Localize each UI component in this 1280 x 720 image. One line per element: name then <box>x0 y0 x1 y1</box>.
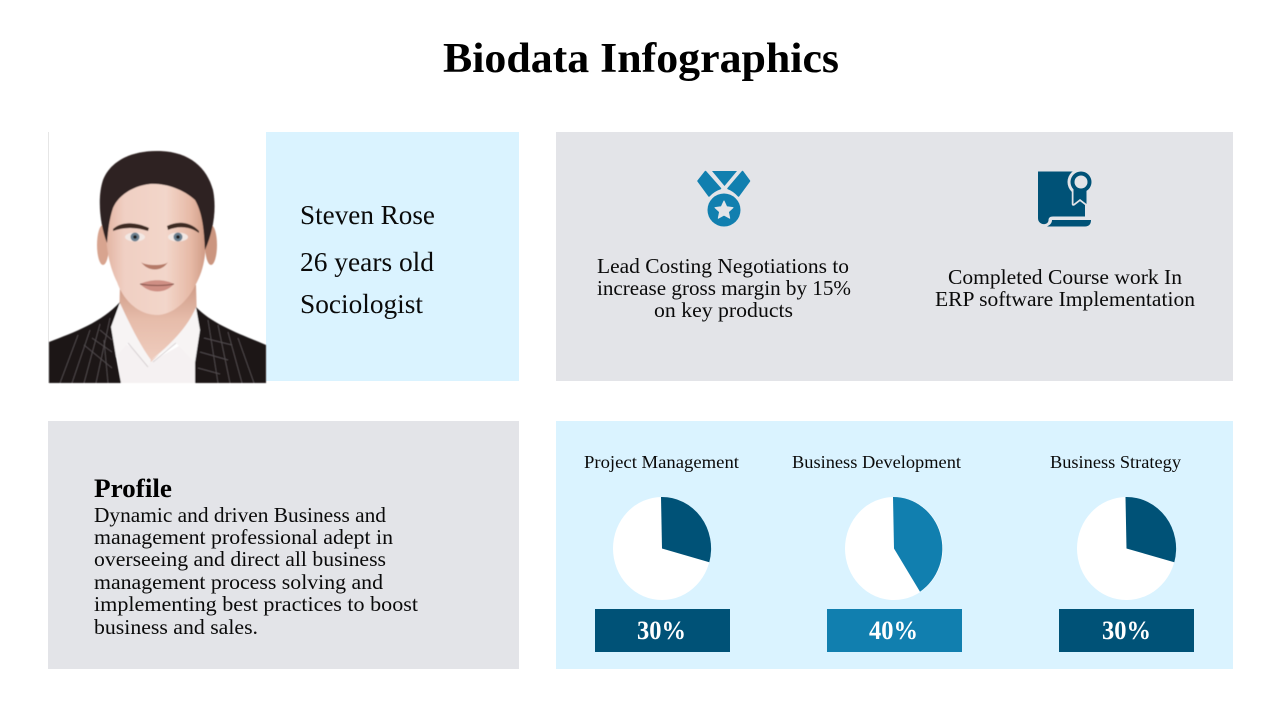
profile heading: Profile <box>94 473 172 503</box>
profile body text: Dynamic and driven Business and <box>94 503 386 527</box>
achievement text: course work: Completed Course work In <box>948 265 1182 289</box>
achievement text: costing: Lead Costing Negotiations to <box>597 254 849 278</box>
skill: project management: Project Management <box>584 452 739 472</box>
title: Biodata Infographics <box>443 36 839 82</box>
achievement text: costing: on key products <box>654 298 793 322</box>
profile body text: management process solving and <box>94 570 383 594</box>
icon: medal <box>698 171 750 226</box>
profile body text: business and sales. <box>94 615 258 639</box>
achievement text: costing <box>597 254 851 322</box>
skill: business development: 40% <box>869 616 918 645</box>
occupation: Sociologist <box>300 289 424 319</box>
profile body text: management professional adept in <box>94 525 393 549</box>
achievement text: course work <box>935 265 1195 311</box>
skill: business development <box>792 452 962 652</box>
panel: profile <box>48 421 519 669</box>
skill: business strategy <box>1050 452 1194 652</box>
panel: skills <box>556 421 1233 669</box>
skill: business strategy: Business Strategy <box>1050 452 1181 472</box>
profile body text <box>94 503 418 639</box>
skill: business strategy: 30% <box>1102 616 1151 645</box>
skill: project management: 30% <box>637 616 686 645</box>
skill: project management <box>584 452 739 652</box>
profile body text: implementing best practices to boost <box>94 592 418 616</box>
age: 26 years old <box>300 247 435 277</box>
skill: business development: Business Development <box>792 452 961 472</box>
profile body text: overseeing and direct all business <box>94 547 386 571</box>
achievement text: costing: increase gross margin by 15% <box>597 276 851 300</box>
achievement text: course work: ERP software Implementation <box>935 287 1195 311</box>
panel: achievements <box>556 132 1233 381</box>
name: Steven Rose <box>300 200 435 230</box>
icon: certificate book <box>1038 168 1094 226</box>
portrait photo <box>48 132 266 383</box>
panel: identity <box>266 132 519 381</box>
